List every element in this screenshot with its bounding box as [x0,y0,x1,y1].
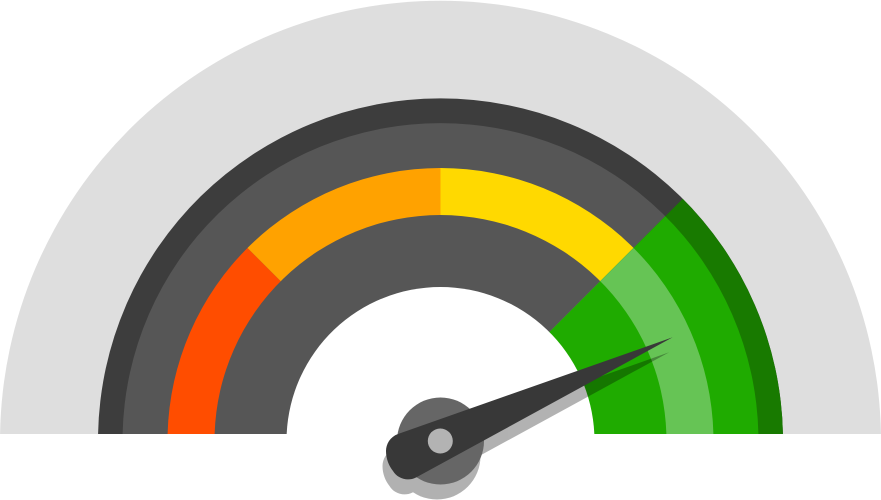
yellow segment [440,168,634,281]
white center cutout [287,287,594,434]
inner gray band [215,215,666,434]
green body [550,216,758,434]
red segment [168,248,281,434]
needle [386,337,673,479]
needle pivot [428,428,453,454]
light green segment [550,248,714,434]
gauge hub [397,398,484,484]
green rim [600,198,783,434]
gauge body [123,123,758,434]
orange segment [248,168,440,282]
green active zone [549,198,783,434]
dark gauge rim [98,98,783,434]
green inner band [550,281,666,434]
needle and hub shadow [382,352,669,500]
